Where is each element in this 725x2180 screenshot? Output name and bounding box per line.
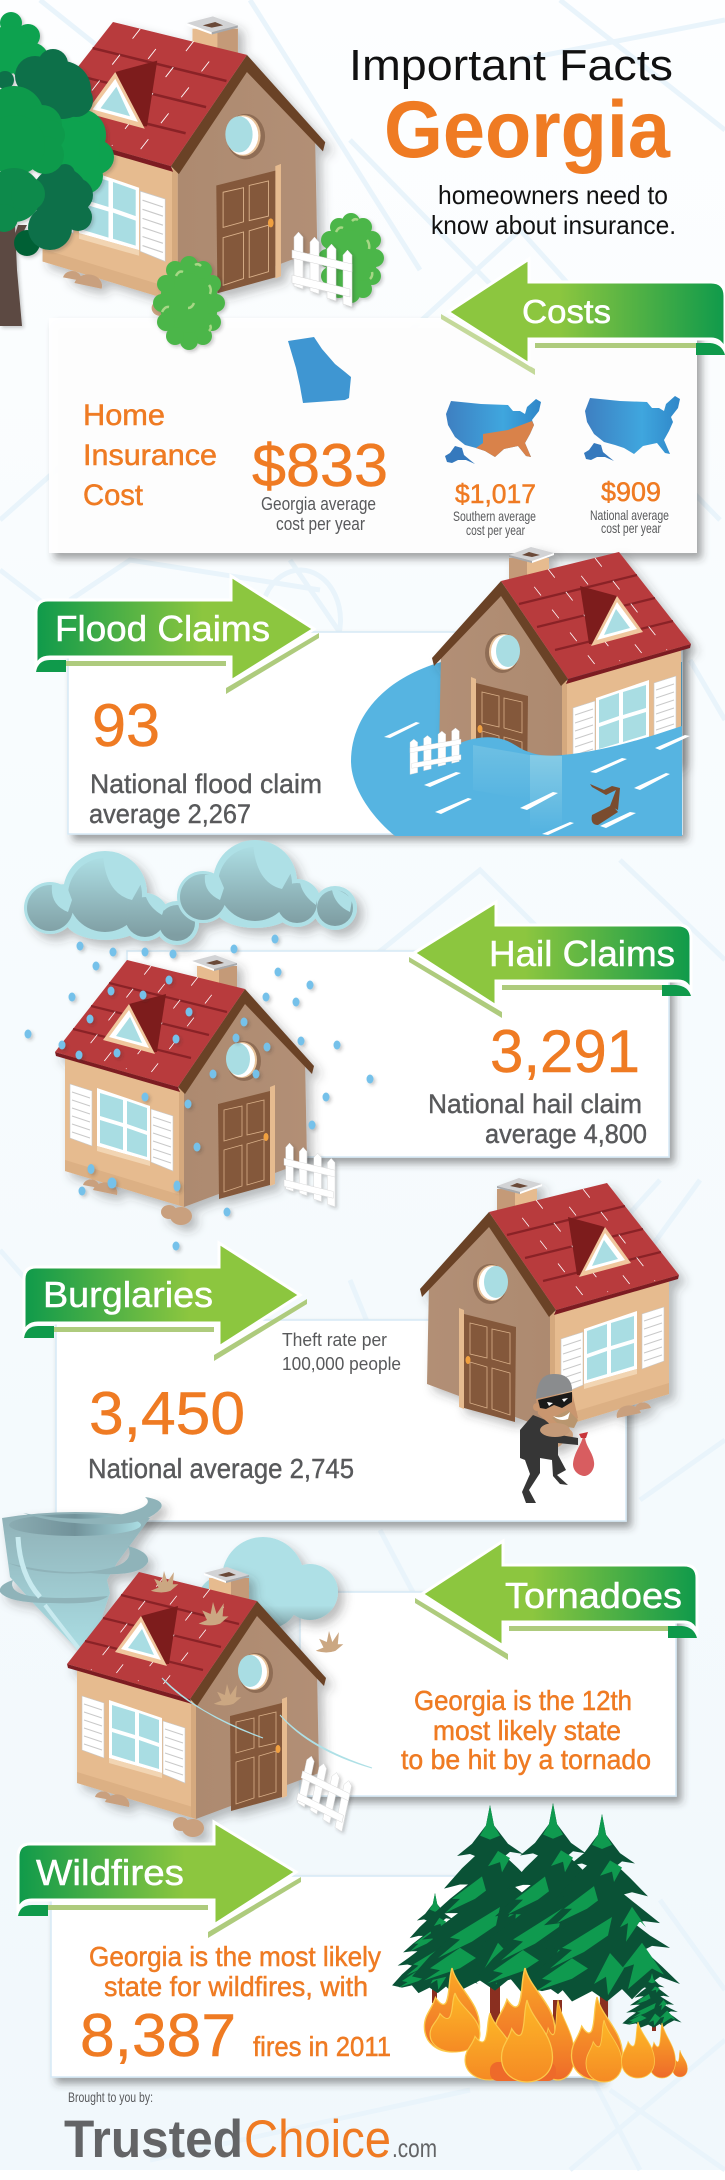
note: theft rate [282,1330,401,1374]
icon: submerged fence [410,728,461,774]
arrow: hail claims [409,902,691,1018]
stat: national average: cost per year [601,520,661,536]
icon: hail fence [284,1143,335,1207]
stat: national average [590,477,669,536]
illustration: flames [424,1968,688,2082]
logo: TrustedChoice.com: .com [392,2133,437,2163]
title: know about insurance. [431,210,676,240]
stat: tornadoes: most likely state [433,1715,621,1746]
arrow: burglaries: Burglaries [43,1274,213,1315]
stat: hail claims [428,1018,647,1149]
stat: Georgia average: Georgia average [261,494,376,514]
icon: white fence [292,232,352,307]
icon: Georgia map [288,337,351,403]
house: hail [55,955,314,1225]
icon: tree [0,12,114,326]
stat: tornadoes [401,1685,651,1775]
stat: wildfires: Georgia is the most likely [89,1941,381,1972]
icon: tornado funnel [0,1497,162,1650]
stat: southern average: $1,017 [455,479,536,509]
icons: leaves and wind [151,1571,372,1768]
icon: tornado cloud [198,1537,338,1628]
arrow: costs: Costs [522,293,611,330]
heading: Home Insurance Cost: Home [83,399,165,432]
stat: burglaries: National average 2,745 [88,1453,354,1484]
stat: southern average [453,479,536,538]
heading: Home Insurance Cost: Cost [83,479,144,512]
title: Georgia [384,85,671,175]
panel: burglaries [56,1320,626,1521]
stat: hail claims: National hail claim [428,1089,642,1119]
hailstones [24,934,374,1250]
arrow: wildfires [18,1822,301,1938]
stat: flood claims: average 2,267 [89,799,251,829]
stat: burglaries [88,1380,354,1484]
credit line: Brought to you by: [68,2089,153,2105]
costs content [83,337,680,538]
heading: Home Insurance Cost [83,399,217,512]
stat: flood claims: National flood claim [90,769,322,799]
stat: national average: National average [590,507,669,523]
house: flooded [432,547,691,817]
heading: Home Insurance Cost: Insurance [83,439,217,472]
stat: Georgia average: $833 [252,432,388,499]
illustration: flooded house [351,547,691,836]
stat: tornadoes: to be hit by a tornado [401,1744,651,1775]
stat: wildfires: fires in 2011 [253,2031,391,2062]
logo: TrustedChoice.com: Trusted [64,2110,243,2169]
stat: tornadoes: Georgia is the 12th [414,1685,632,1716]
stat: flood claims: 93 [92,692,160,759]
icon: storm clouds [24,840,357,945]
stat: wildfires [80,1941,391,2069]
stat: Georgia average [252,432,388,534]
stat: southern average: cost per year [466,522,525,538]
note: theft rate: 100,000 people [282,1354,401,1374]
water streaks [384,722,690,835]
icon: floating log [590,784,620,825]
arrow: flood claims: Flood Claims [55,608,270,649]
arrow: tornadoes [415,1541,697,1660]
house: tornado [67,1567,326,1837]
note: theft rate: Theft rate per [282,1330,387,1350]
stat: national average: $909 [601,477,661,507]
icon: broken fence [292,1755,356,1832]
stat: wildfires: 8,387 [80,2002,236,2069]
illustration: pine trees [392,1803,682,2042]
panel: flood claims [68,632,682,834]
icon: back bush [318,213,384,303]
stat: burglaries: 3,450 [89,1380,245,1447]
panel: wildfires [51,1876,600,2077]
title: homeowners need to [438,180,668,210]
stat: Georgia average: cost per year [276,514,365,534]
house: burglary [420,1178,679,1448]
stat: southern average: Southern average [453,508,536,524]
icon: front bush [153,256,225,350]
map: southern US [445,399,541,464]
arrow: wildfires: Wildfires [36,1852,184,1893]
panel: hail claims [127,951,669,1157]
logo: TrustedChoice.com [64,2110,437,2169]
title [349,41,676,240]
arrow: flood claims [36,576,319,694]
arrow: tornadoes: Tornadoes [505,1575,682,1616]
arrow: costs [441,259,725,375]
icon: burglar [520,1374,594,1503]
front water [420,726,682,836]
title: Important Facts [349,41,673,90]
stat: wildfires: state for wildfires, with [104,1971,368,2002]
logo: TrustedChoice.com: Choice [244,2110,391,2169]
stat: flood claims [89,692,322,829]
stat: hail claims: 3,291 [490,1018,640,1085]
stat: hail claims: average 4,800 [485,1119,647,1149]
panel: tornadoes [300,1592,676,1796]
arrow: hail claims: Hail Claims [489,933,675,974]
house: top illustration [31,16,325,323]
panel: costs [49,318,697,553]
map: national US [584,396,680,461]
arrow: burglaries [24,1243,307,1361]
